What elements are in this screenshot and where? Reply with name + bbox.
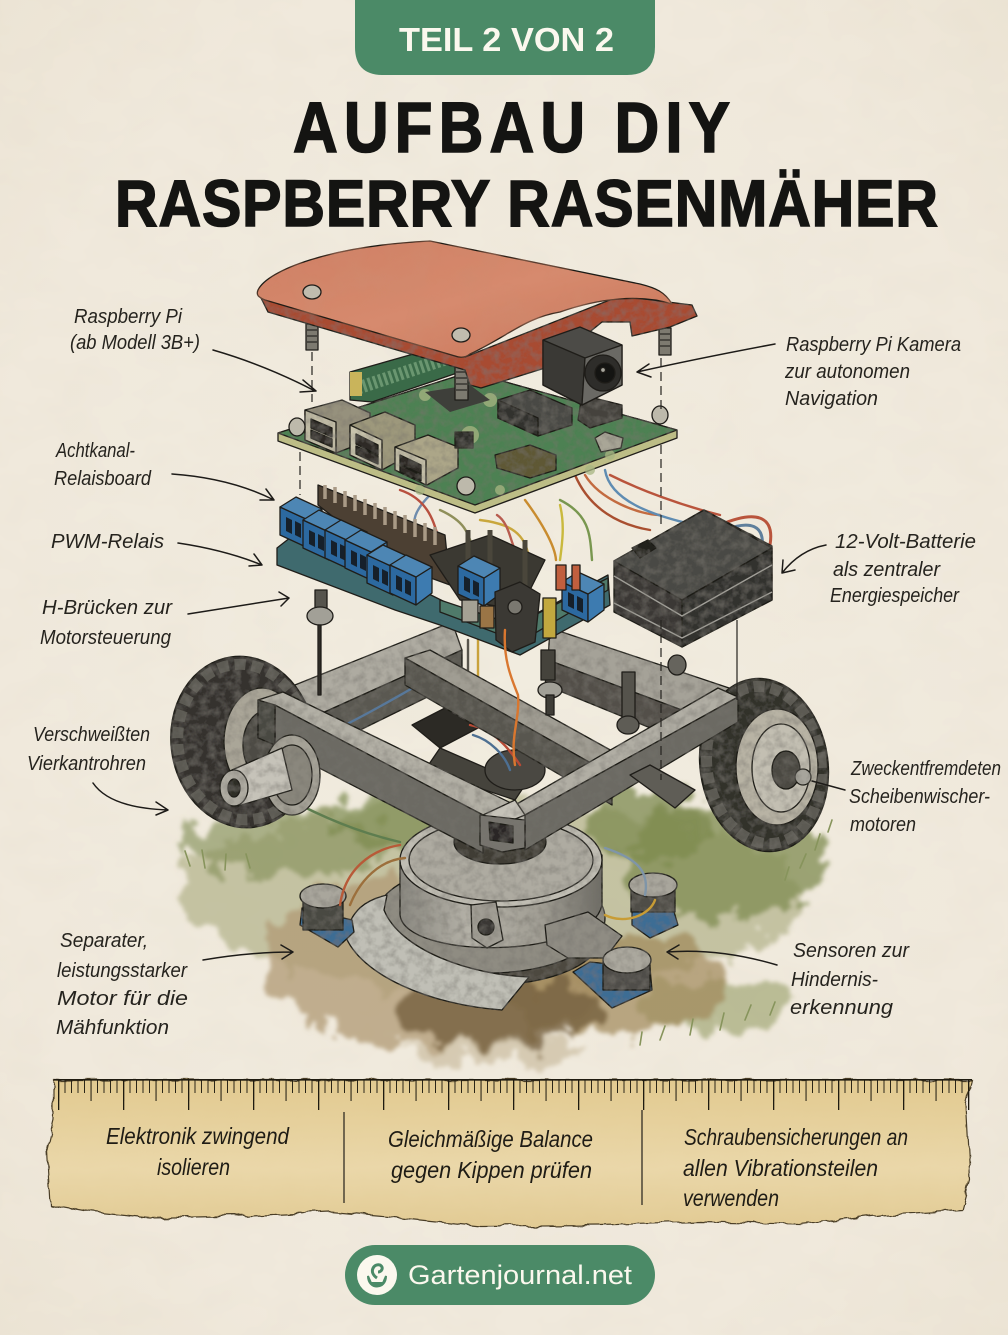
cutting blade	[345, 895, 529, 1010]
label: Relaisboard	[54, 440, 274, 500]
label: Mähmotor: Separater,	[60, 930, 148, 952]
lid side	[258, 292, 697, 388]
tip 3	[683, 1124, 908, 1211]
label: Scheibenwischermotoren	[812, 758, 1001, 836]
icon: garden logo	[357, 1255, 397, 1295]
label: Mähmotor: Motor für die	[57, 988, 188, 1010]
title: AUFBAU DIY	[293, 89, 730, 168]
label: Batterie: Energiespeicher	[830, 585, 960, 607]
lid top	[257, 241, 672, 357]
sensor right back	[629, 873, 678, 938]
label: PWM-Relais: PWM-Relais	[51, 531, 164, 553]
label: Relaisboard: Relaisboard	[54, 468, 152, 490]
rear frame beams	[270, 622, 735, 740]
label: Scheibenwischermotoren: motoren	[850, 814, 916, 836]
threaded lid bolts	[306, 318, 671, 400]
torn paper	[47, 1080, 972, 1226]
label: Sensoren: erkennung	[790, 997, 893, 1019]
label: H-Brücken: H-Brücken zur	[42, 597, 173, 619]
label: Kamera	[637, 334, 961, 410]
camera module	[543, 327, 622, 405]
label: Raspberry Pi	[70, 306, 316, 392]
label: H-Brücken: Motorsteuerung	[40, 627, 171, 649]
tip 2: Gleichmäßige Balance	[388, 1126, 593, 1152]
label: Sensoren: Sensoren zur	[793, 940, 910, 962]
wires between boards	[400, 470, 771, 575]
tip 3: verwenden	[683, 1185, 779, 1211]
pcb	[278, 372, 677, 513]
label: PWM-Relais	[51, 531, 262, 566]
mount bracket	[545, 912, 622, 958]
grass blades	[185, 820, 832, 1045]
centre cross beam	[405, 650, 632, 805]
label: Batterie	[782, 531, 976, 607]
footer badge: Gartenjournal.net	[408, 1260, 633, 1290]
standoff bolts	[307, 590, 686, 734]
label: H-Brücken	[40, 592, 289, 649]
title: RASPBERRY RASENMÄHER	[115, 167, 938, 241]
front frame beams	[258, 688, 738, 853]
tip 2: gegen Kippen prüfen	[391, 1157, 592, 1183]
left wheel	[160, 647, 326, 837]
lid cover	[257, 241, 697, 400]
raspberry pi board	[278, 345, 677, 513]
dashed assembly lines	[300, 352, 737, 780]
illustration: exploded lawnmower robot	[160, 241, 839, 1064]
banner: part 2 of 2: TEIL 2 VON 2	[399, 21, 614, 58]
label: Kamera: Navigation	[785, 388, 878, 410]
label: Mähmotor: leistungsstarker	[57, 960, 188, 982]
blue cable and lower motor parts	[345, 640, 545, 800]
blue relays	[280, 497, 604, 622]
sensor right front	[573, 947, 652, 1008]
label: Scheibenwischermotoren: Scheibenwischer-	[849, 786, 990, 808]
usb ports	[305, 390, 623, 485]
label: Batterie: 12-Volt-Batterie	[835, 531, 976, 553]
lid screws	[303, 285, 470, 342]
sensor mount screw	[471, 902, 503, 948]
ground: grass and soil	[180, 790, 832, 1064]
label: Vierkantrohren	[27, 724, 168, 815]
tip 2	[388, 1126, 593, 1183]
label: Relaisboard: Achtkanal-	[55, 440, 135, 462]
wheel axle	[220, 735, 320, 815]
label: Kamera: Raspberry Pi Kamera	[786, 334, 961, 356]
tip 1: isolieren	[157, 1154, 230, 1180]
tip 1: Elektronik zwingend	[106, 1123, 290, 1149]
label: Batterie: als zentraler	[833, 559, 941, 581]
label: Mähmotor: Mähfunktion	[56, 1017, 169, 1039]
title	[115, 89, 938, 241]
gpio header	[350, 345, 460, 402]
ruler ticks	[54, 1079, 972, 1110]
relay board	[277, 485, 610, 765]
sensor wires	[300, 805, 655, 919]
header pins	[318, 485, 545, 610]
label: Mähmotor	[56, 930, 293, 1039]
banner: part 2 of 2	[355, 0, 655, 75]
label: Vierkantrohren: Vierkantrohren	[27, 753, 146, 775]
label: Vierkantrohren: Verschweißten	[33, 724, 150, 746]
label: Raspberry Pi: Raspberry Pi	[74, 306, 183, 328]
tip 3: Schraubensicherungen an	[684, 1124, 908, 1150]
ruler tips panel	[47, 1079, 972, 1226]
battery	[614, 510, 772, 647]
tip 1	[106, 1123, 290, 1180]
label: Kamera: zur autonomen	[784, 361, 910, 383]
sensor left	[300, 884, 354, 947]
footer badge	[345, 1245, 655, 1305]
pcb screws	[289, 406, 668, 495]
mixed components	[462, 565, 580, 652]
label: Raspberry Pi: (ab Modell 3B+)	[70, 332, 200, 354]
right wheel	[689, 670, 839, 860]
tip 3: allen Vibrationsteilen	[683, 1155, 878, 1181]
mowing motor housing	[375, 813, 622, 985]
label: Sensoren: Hindernis-	[791, 969, 878, 991]
label: Sensoren	[667, 940, 910, 1019]
rear stub tube	[630, 765, 695, 808]
